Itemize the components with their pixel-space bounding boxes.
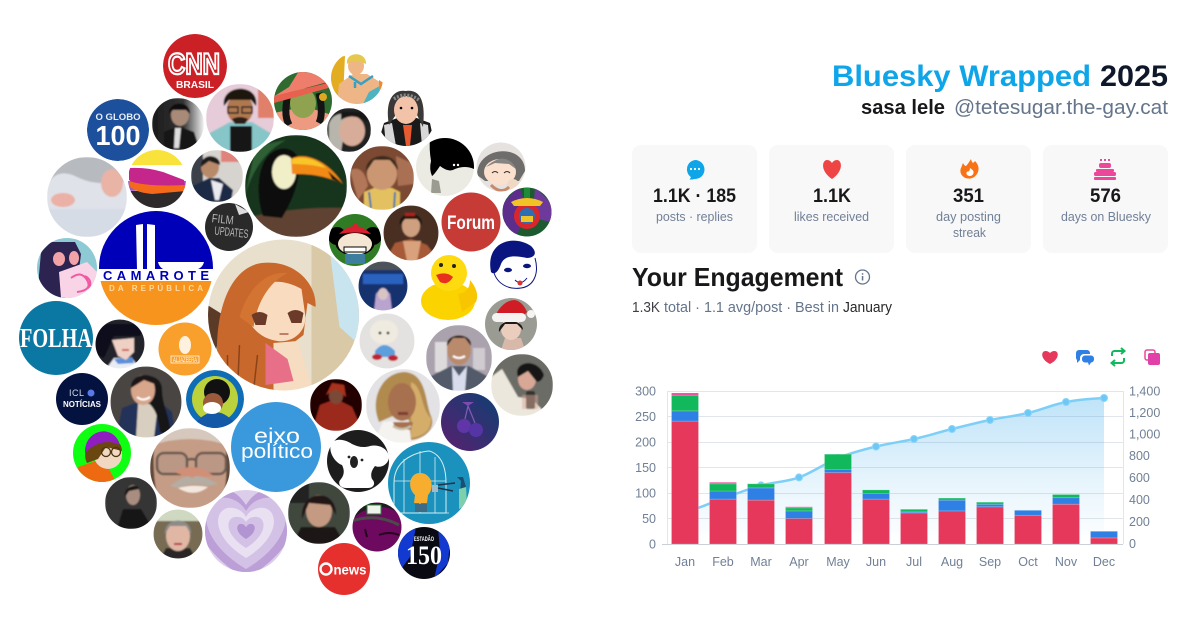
month labels: Jan [675, 555, 695, 569]
avatar: Estadão 150: 150 [406, 541, 442, 570]
stat card: days on Bluesky: days on Bluesky [1061, 210, 1152, 224]
avatar: glam woman with blonde waves [366, 369, 440, 443]
heading: Your Engagement: Your Engagement [632, 262, 843, 292]
engagement summary [632, 300, 893, 316]
avatar: Folha logo: FOLHA [20, 323, 92, 353]
icon: quotes legend [1145, 350, 1160, 365]
left axis: 150 [635, 461, 656, 475]
avatar: Film Updates: FILM [211, 211, 234, 227]
right axis: 1,000 [1129, 428, 1160, 442]
avatar: Estadão 150 [398, 527, 450, 579]
avatar: man with curly hair and glasses [206, 84, 274, 152]
avatar: woman with silver hair [327, 108, 371, 152]
stat card: likes [769, 145, 894, 253]
engagement summary: total · 1.1 avg/post · Best in [664, 300, 839, 316]
engagement summary: 1.3K [632, 300, 660, 316]
icon: likes legend [1042, 351, 1058, 364]
stat card: days on Bluesky: 576 [1090, 186, 1121, 207]
avatar: painted woman [383, 205, 439, 261]
combined chart [635, 384, 1160, 569]
month labels: Feb [712, 555, 734, 569]
avatar: Eixo Político: político [241, 441, 313, 463]
left axis [635, 384, 656, 552]
legend icons [1042, 348, 1160, 366]
avatar: CNN Brasil: CNN [168, 48, 220, 81]
month labels: Apr [789, 555, 809, 569]
avatar: red jester painting [310, 379, 362, 431]
avatar: Eixo Político: eixo [254, 425, 300, 448]
avatar: toes in foam [47, 157, 127, 237]
avatar: badge with masked figure [186, 370, 244, 428]
avatar: black blob [416, 138, 474, 196]
month labels: Sep [979, 555, 1001, 569]
avatar: smiling woman in navy blazer [110, 366, 182, 438]
right axis: 200 [1129, 515, 1150, 529]
avatar: man in black jacket [152, 98, 204, 150]
avatar: Camarote da República: DA REPÚBLICA [109, 284, 203, 293]
right axis: 400 [1129, 493, 1150, 507]
user name and handle: @tetesugar.the-gay.cat [954, 97, 1168, 119]
avatar cloud [19, 34, 553, 595]
left axis: 0 [649, 538, 656, 552]
avatar: young man with dark hair [288, 482, 350, 544]
icon: replies legend [1076, 350, 1094, 366]
avatar: guy with mirror selfie [491, 354, 553, 416]
avatar: ICL Notícias [56, 373, 108, 425]
avatar: Luna cat [37, 238, 99, 298]
month labels: Aug [941, 555, 963, 569]
avatar: anime girl with orange hair [208, 239, 360, 391]
stat card: streak: 351 [953, 186, 984, 207]
avatar: older man with moustache [150, 428, 230, 508]
stat card: posts and replies: posts · replies [656, 210, 733, 224]
avatar: Pucca [328, 214, 382, 266]
right axis: 1,400 [1129, 384, 1160, 398]
avatar: woman with Santa hat [485, 298, 537, 350]
avatar: concert stage [358, 261, 408, 311]
avatar: O Globo 100 [87, 99, 149, 161]
icon: flame [960, 159, 979, 179]
icon: heart [823, 160, 841, 179]
avatar: colourful emblem [502, 187, 552, 237]
avatar: blond muscle man [331, 52, 385, 104]
avatar: Folha logo [19, 301, 93, 375]
left axis: 200 [635, 436, 656, 450]
avatar: O Globo 100: 100 [96, 120, 140, 151]
avatar: light bulb in cage [388, 442, 470, 524]
avatar: Al Jazeera [158, 322, 212, 376]
right axis: 600 [1129, 471, 1150, 485]
stat card: streak: day posting [936, 210, 1001, 224]
avatar: CNN Brasil [163, 34, 227, 98]
icon: reposts legend [1112, 348, 1124, 366]
left axis: 300 [635, 384, 656, 398]
month labels: Oct [1018, 555, 1038, 569]
avatar: Camarote da República: CAMAROTE [103, 268, 209, 283]
avatar: O Globo 100: O GLOBO [95, 112, 141, 122]
user name and handle: sasa lele [861, 97, 945, 119]
avatar: drawn maid [381, 90, 432, 146]
avatar: Camarote da República [99, 211, 213, 325]
month labels: Nov [1055, 555, 1078, 569]
stat card: likes: 1.1K [813, 186, 851, 207]
stat card: likes: likes received [794, 210, 869, 224]
avatar: blue-haired cartoon face [486, 239, 540, 293]
cumulative line [685, 394, 1108, 512]
stat card: streak [906, 145, 1031, 253]
month labels: Dec [1093, 555, 1115, 569]
avatar: Forum logo: Forum [447, 213, 495, 234]
avatar: GloboNews: news [334, 562, 367, 578]
avatar: dark-haired young person [94, 319, 146, 369]
right axis: 800 [1129, 449, 1150, 463]
avatar: CNN Brasil: BRASIL [176, 79, 215, 91]
engagement summary: January [843, 300, 893, 316]
stacked monthly bars [672, 393, 1118, 544]
avatar: older woman with glasses [153, 509, 203, 559]
stat card: posts and replies: 1.1K · 185 [653, 186, 736, 207]
left axis: 50 [642, 512, 656, 526]
avatar: Forum logo [442, 192, 500, 252]
icon: chat bubble [687, 160, 704, 180]
avatar: green witch [273, 71, 332, 130]
avatar: smiling man in grey sweater [426, 325, 492, 391]
right axis [1129, 384, 1160, 551]
avatar: toucan [245, 135, 347, 237]
month labels: May [826, 555, 851, 569]
right axis: 0 [1129, 537, 1136, 551]
avatar: pink loafer [128, 150, 186, 208]
avatar: ICL Notícias: ICL [69, 388, 84, 398]
stat card: days on Bluesky [1043, 145, 1168, 253]
avatar: GloboNews [318, 543, 370, 595]
avatar: person in dark profile [105, 477, 157, 529]
avatar: Al Jazeera: ALJAZEERA [173, 358, 197, 364]
month labels: Mar [750, 555, 772, 569]
icon: cake [1094, 159, 1116, 180]
avatar: white koala on black [327, 430, 389, 492]
avatar: drawn person on lime background [73, 424, 131, 482]
cumulative area [685, 398, 1104, 544]
month labels: Jul [906, 555, 922, 569]
avatar: man in suit selfie [191, 150, 243, 202]
user name and handle [861, 97, 1168, 119]
avatar: Estadão 150: ESTADÃO [414, 536, 434, 543]
stat card: streak: streak [953, 226, 987, 240]
header title: Bluesky Wrapped [832, 60, 1091, 93]
avatar: ICL Notícias: NOTÍCIAS [63, 400, 102, 409]
avatar: child in yellow tank top [350, 146, 414, 210]
avatar: felt sheep [359, 313, 415, 369]
left axis: 250 [635, 410, 656, 424]
avatar: chibi grey-haired girl [476, 142, 526, 192]
icon: info [856, 270, 870, 284]
stat card: posts and replies [632, 145, 757, 253]
grid lines [662, 391, 1124, 544]
avatar: cherries [441, 393, 499, 451]
avatar: concentric lilac hearts [205, 490, 287, 572]
avatar: Eixo Político [231, 402, 321, 492]
avatar: Film Updates: UPDATES [214, 224, 249, 241]
month labels: Jun [866, 555, 886, 569]
month labels [675, 555, 1115, 569]
avatar: purple cartoon with cap [352, 502, 402, 552]
header title: 2025 [1100, 60, 1168, 93]
avatar: Film Updates [205, 203, 253, 251]
avatar: rubber duck [421, 255, 477, 320]
right axis: 1,200 [1129, 406, 1160, 420]
left axis: 100 [635, 486, 656, 500]
